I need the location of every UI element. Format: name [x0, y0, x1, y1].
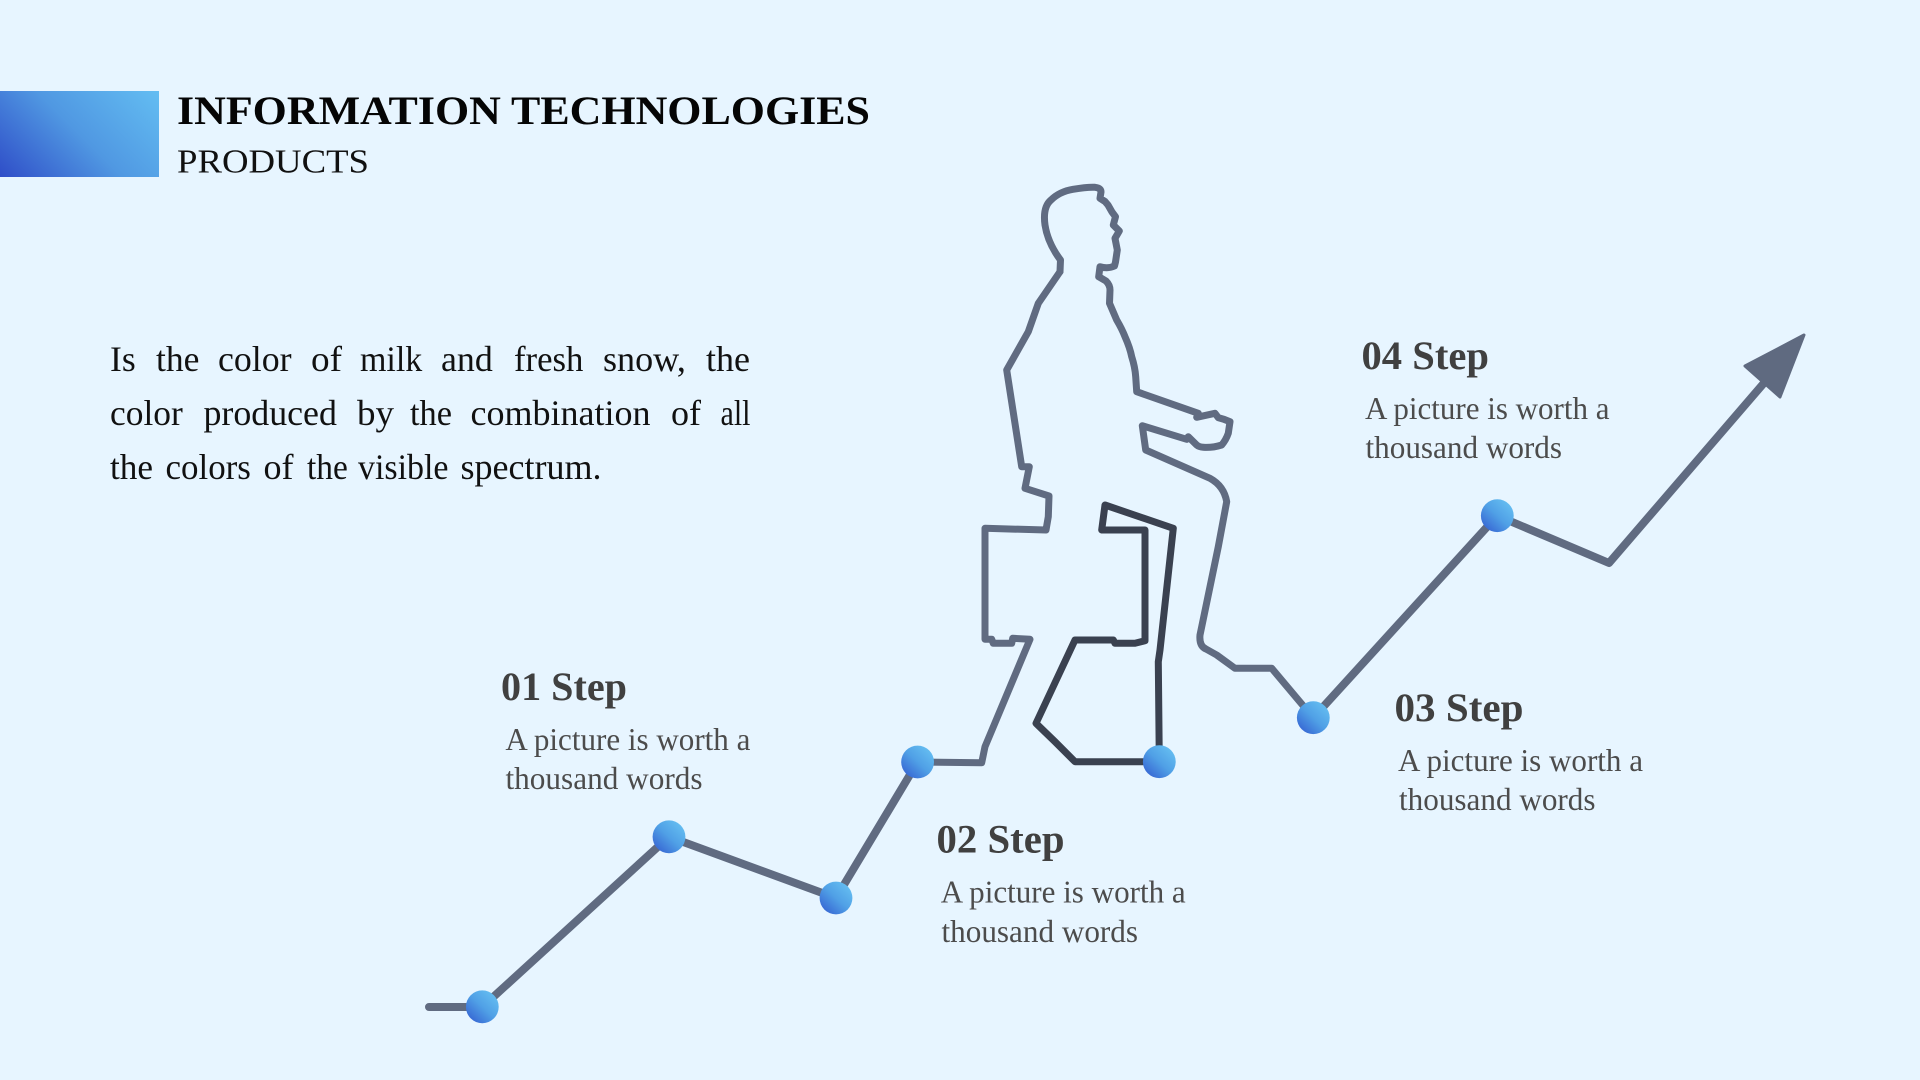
body paragraph: snow, [603, 339, 686, 379]
body paragraph: of [311, 339, 342, 379]
silhouette: back, briefcase and rear leg [918, 272, 1060, 763]
step 04 description [1365, 390, 1610, 465]
step 02 heading: 02 Step [936, 817, 1064, 862]
rising line [429, 762, 918, 1007]
node dots [466, 499, 1514, 1023]
body paragraph: and [441, 339, 493, 379]
step 04 description: A picture is worth a [1365, 390, 1610, 426]
step 03 description [1398, 742, 1643, 817]
step 02 description [941, 874, 1186, 949]
body paragraph [110, 339, 751, 487]
step 02 [936, 817, 1186, 949]
title [177, 88, 870, 180]
body paragraph: colors [166, 447, 251, 487]
step 03 description: thousand words [1399, 781, 1596, 817]
body paragraph: fresh [514, 339, 584, 379]
body paragraph: produced [204, 393, 337, 433]
step 04 heading: 04 Step [1362, 333, 1489, 378]
step 04 [1362, 333, 1610, 465]
body paragraph: the [706, 339, 750, 379]
step 03 [1394, 685, 1643, 817]
header accent block [0, 91, 159, 177]
body paragraph: the [410, 393, 452, 433]
step 04 description: thousand words [1366, 429, 1562, 465]
body paragraph: of [671, 393, 701, 433]
step 02 description: A picture is worth a [941, 874, 1186, 910]
step 03 description: A picture is worth a [1398, 742, 1643, 778]
body paragraph: spectrum. [460, 447, 602, 487]
heading: information technologies: INFORMATION TECHNOLOGIES [177, 88, 870, 133]
step 01 heading: 01 Step [501, 664, 627, 709]
step 01 description: thousand words [506, 760, 702, 796]
step 01 [501, 664, 750, 796]
silhouette: body outline and front leg [1044, 187, 1313, 718]
body paragraph: milk [360, 339, 422, 379]
body paragraph: color [218, 339, 292, 379]
body paragraph: all [720, 393, 751, 433]
body paragraph: Is [110, 339, 136, 379]
body paragraph: the [307, 447, 348, 487]
arrow head [1745, 335, 1804, 397]
growth line chart with person silhouette [429, 187, 1804, 1023]
rising line to arrow [1313, 376, 1770, 718]
body paragraph: color [110, 393, 183, 433]
step 03 heading: 03 Step [1394, 685, 1524, 730]
body paragraph: the [110, 447, 153, 487]
body paragraph: combination [470, 393, 651, 433]
silhouette: inner dark leg [1036, 505, 1173, 762]
step 01 description [505, 721, 750, 796]
step 02 description: thousand words [942, 913, 1138, 949]
subheading: products: PRODUCTS [177, 144, 369, 180]
step 01 description: A picture is worth a [505, 721, 750, 757]
body paragraph: by [357, 393, 394, 433]
body paragraph: the [156, 339, 199, 379]
body paragraph: of [264, 447, 294, 487]
body paragraph: visible [358, 447, 448, 487]
